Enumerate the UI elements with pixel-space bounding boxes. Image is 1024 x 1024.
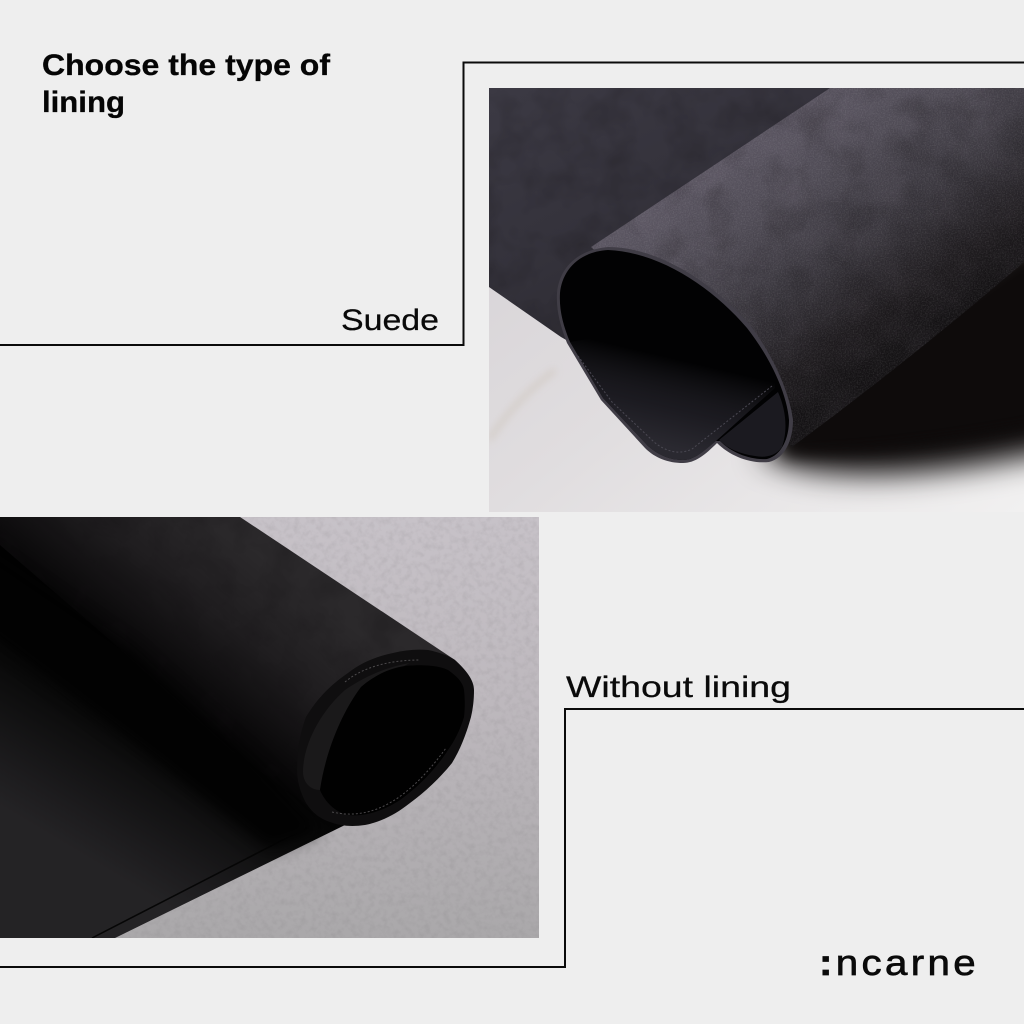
suede light mottling (591, 88, 1024, 447)
title: lining (42, 86, 125, 119)
lower lining panel (570, 335, 775, 460)
body grain (282, 544, 400, 624)
rolled suede body (591, 88, 1024, 447)
concrete mottling (233, 517, 539, 914)
roll opening interior (560, 250, 789, 460)
inner suede crescent (303, 663, 410, 790)
title: Choose the type of (42, 49, 330, 82)
marble surface (489, 287, 776, 512)
marble vein (489, 370, 555, 440)
contact shadow (780, 240, 1024, 455)
flat leather sheet (0, 540, 345, 938)
sheet edge (92, 850, 262, 938)
flat suede sheet (489, 88, 840, 345)
stitching (578, 356, 772, 452)
soft black transition (210, 790, 326, 860)
rolled body (0, 517, 455, 772)
cast shadow (760, 235, 1024, 474)
logo: incarne: :ncarne (819, 942, 979, 983)
label: Without lining: Without lining (566, 671, 791, 704)
frame line: bottom section (0, 709, 1024, 967)
roll opening rim (557, 247, 793, 463)
frame line: top section (0, 62, 1024, 345)
roll opening interior (320, 665, 465, 815)
label: Suede: Suede (341, 304, 439, 337)
photo: without lining roll (0, 517, 539, 938)
roll opening rim (297, 650, 474, 826)
stitching (332, 660, 446, 814)
photo: suede lining roll (489, 88, 1024, 512)
sheet mottling (611, 157, 621, 164)
inner flap (719, 392, 785, 457)
suede dark mottling (656, 88, 972, 309)
concrete surface (115, 517, 539, 938)
suede grain (591, 88, 1024, 447)
